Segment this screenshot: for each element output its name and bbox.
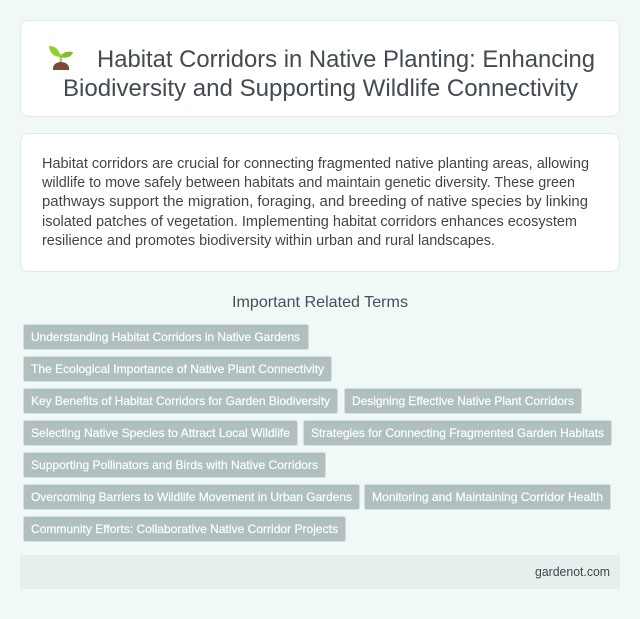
panel: introduction: wildlife to move safely between habitats and maintain genetic diversity. These green xyxy=(41,175,575,191)
panel: related term tags: Supporting Pollinators and Birds with Native Corridors xyxy=(31,458,318,472)
panel: title card xyxy=(20,20,620,116)
panel: related term tags: The Ecological Importance of Native Plant Connectivity xyxy=(31,362,324,376)
footer: gardenot.com xyxy=(535,564,610,579)
panel: related term tags xyxy=(24,324,612,542)
panel: related term tags: Overcoming Barriers to Wildlife Movement in Urban Gardens xyxy=(31,490,352,504)
panel: introduction: pathways support the migration, foraging, and breeding of native species by linking xyxy=(42,194,588,210)
panel: introduction xyxy=(20,134,620,272)
panel: related term tags: Community Efforts: Collaborative Native Corridor Projects xyxy=(31,522,338,536)
panel: related term tags: Key Benefits of Habitat Corridors for Garden Biodiversity xyxy=(31,394,330,408)
panel: introduction: resilience and promotes biodiversity within urban and rural landscapes. xyxy=(42,233,495,249)
panel: related term tags: Strategies for Connecting Fragmented Garden Habitats xyxy=(311,426,604,440)
heading: related terms: Important Related Terms xyxy=(232,294,408,311)
panel: related term tags: Monitoring and Maintaining Corridor Health xyxy=(372,490,603,504)
panel: related term tags: Selecting Native Species to Attract Local Wildlife xyxy=(31,426,290,440)
panel: introduction: Habitat corridors are crucial for connecting fragmented native planting areas, allowing xyxy=(42,156,589,172)
panel: related term tags: Designing Effective Native Plant Corridors xyxy=(352,394,574,408)
title: Habitat Corridors in Native Planting: Enhancing xyxy=(97,46,595,73)
panel: related term tags: Understanding Habitat Corridors in Native Gardens xyxy=(31,330,300,344)
footer xyxy=(20,555,620,589)
icon: seedling xyxy=(49,46,73,70)
title xyxy=(63,46,595,102)
title: Biodiversity and Supporting Wildlife Connectivity xyxy=(63,75,578,102)
panel: introduction: isolated patches of vegetation. Implementing habitat corridors enhances ecosystem xyxy=(42,214,577,230)
